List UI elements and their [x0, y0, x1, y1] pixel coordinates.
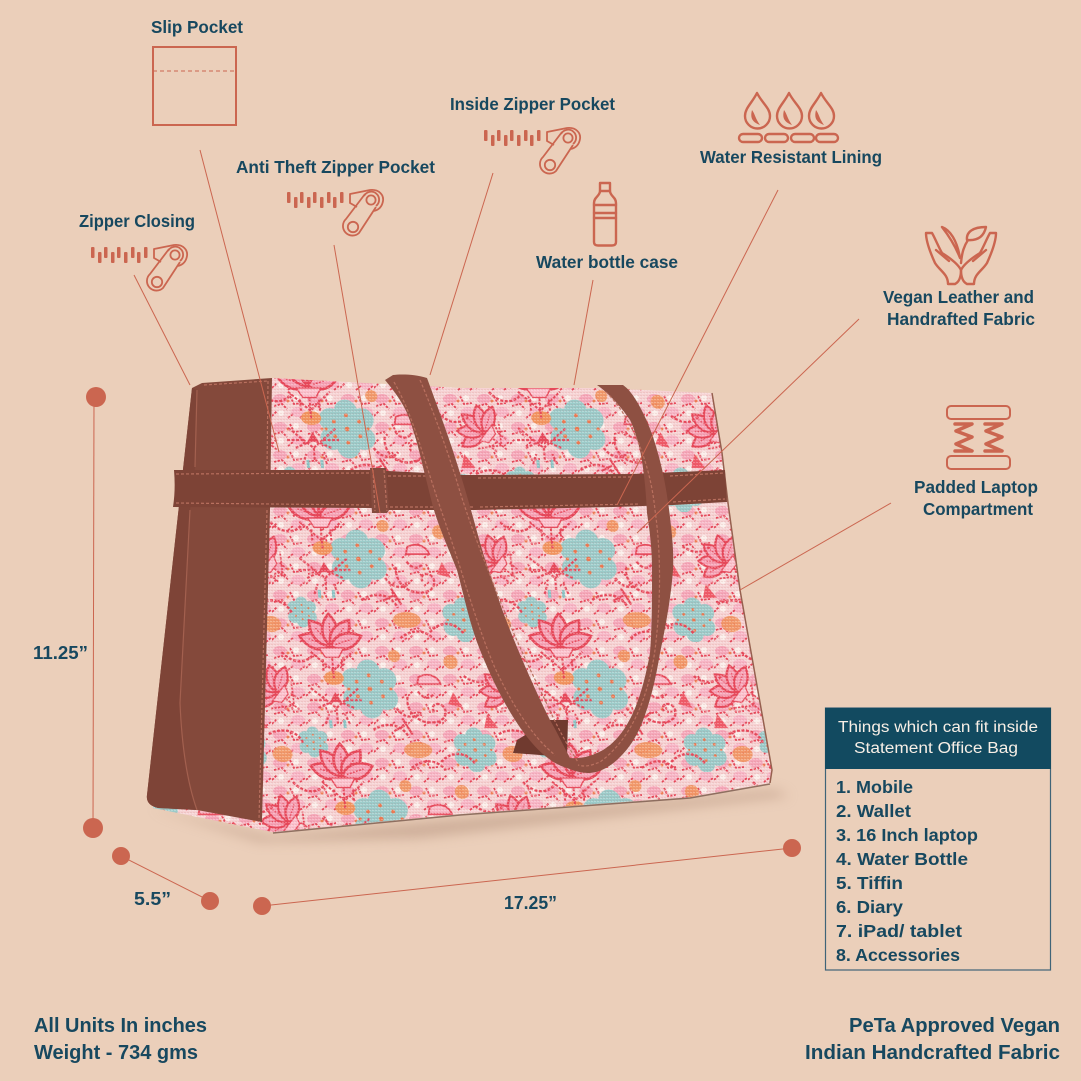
- leader lines: [134, 150, 891, 590]
- label: slip pocket: Slip Pocket: [151, 17, 243, 37]
- list of items: 3. 16 Inch laptop: [836, 825, 978, 845]
- shoulder strap: [385, 374, 673, 773]
- label: water bottle case: Water bottle case: [536, 252, 678, 272]
- list of items: 5. Tiffin: [836, 873, 903, 893]
- icon: water bottle: [594, 183, 616, 246]
- footer: vegan and handcrafted: [805, 1014, 1060, 1064]
- side gusset leather: [147, 378, 272, 822]
- footer: units and weight: Weight - 734 gms: [34, 1041, 198, 1064]
- product: tote bag illustration: [147, 374, 790, 842]
- panel: things which fit inside: [825, 708, 1051, 970]
- label: vegan leather and handcrafted fabric: Handrafted Fabric: [887, 309, 1035, 329]
- panel heading: Things which can fit inside: [838, 719, 1038, 736]
- icon: zipper closing: [91, 245, 187, 291]
- icon: zipper inside: [484, 128, 580, 174]
- dimension label: depth: 5.5”: [134, 889, 171, 909]
- dimension label: width: 17.25”: [504, 893, 557, 913]
- icon: slip pocket: [153, 47, 236, 125]
- gusset fold lines: [180, 390, 197, 810]
- label: anti theft zipper pocket: Anti Theft Zipper Pocket: [236, 157, 435, 177]
- dimension: width: [253, 839, 801, 915]
- list of items: 2. Wallet: [836, 801, 911, 821]
- belt: [173, 468, 727, 513]
- label: vegan leather and handcrafted fabric: Vegan Leather and: [883, 287, 1034, 307]
- dimension: depth: [112, 847, 219, 910]
- label: padded laptop compartment: Padded Laptop: [914, 477, 1038, 497]
- bag shadow: [150, 790, 790, 842]
- icon: water drops: [739, 93, 838, 142]
- list of items: 7. iPad/ tablet: [836, 921, 962, 941]
- panel heading: Statement Office Bag: [854, 740, 1018, 757]
- dimension label: height: 11.25”: [33, 643, 88, 663]
- footer: vegan and handcrafted: PeTa Approved Vegan: [849, 1014, 1060, 1037]
- list of items: 6. Diary: [836, 897, 903, 917]
- icon: zipper anti theft: [287, 190, 383, 236]
- label: zipper closing: Zipper Closing: [79, 211, 195, 231]
- list of items: 8. Accessories: [836, 945, 960, 965]
- dimension: height: [83, 387, 106, 838]
- fabric bottom edge: [273, 784, 770, 833]
- gusset stitching: [204, 381, 268, 820]
- list of items: [836, 777, 978, 965]
- strap stitching: [394, 382, 555, 755]
- label: water resistant lining: Water Resistant Lining: [700, 147, 882, 167]
- belt loop: [370, 468, 389, 513]
- footer: vegan and handcrafted: Indian Handcrafted Fabric: [805, 1041, 1060, 1064]
- list of items: 4. Water Bottle: [836, 849, 968, 869]
- icon: hands with leaves: [926, 227, 996, 284]
- icon: padded springs: [947, 406, 1010, 469]
- gusset darker front fold: [147, 388, 197, 810]
- label: padded laptop compartment: [914, 477, 1038, 519]
- label: vegan leather and handcrafted fabric: [883, 287, 1035, 329]
- footer: units and weight: All Units In inches: [34, 1014, 207, 1037]
- label: inside zipper pocket: Inside Zipper Pocket: [450, 94, 615, 114]
- fabric front panel: [153, 378, 772, 832]
- fabric right piping: [712, 393, 772, 783]
- tab: [513, 720, 568, 757]
- label: padded laptop compartment: Compartment: [923, 499, 1033, 519]
- footer: units and weight: [34, 1014, 207, 1064]
- list of items: 1. Mobile: [836, 777, 913, 797]
- panel heading: [825, 708, 1051, 769]
